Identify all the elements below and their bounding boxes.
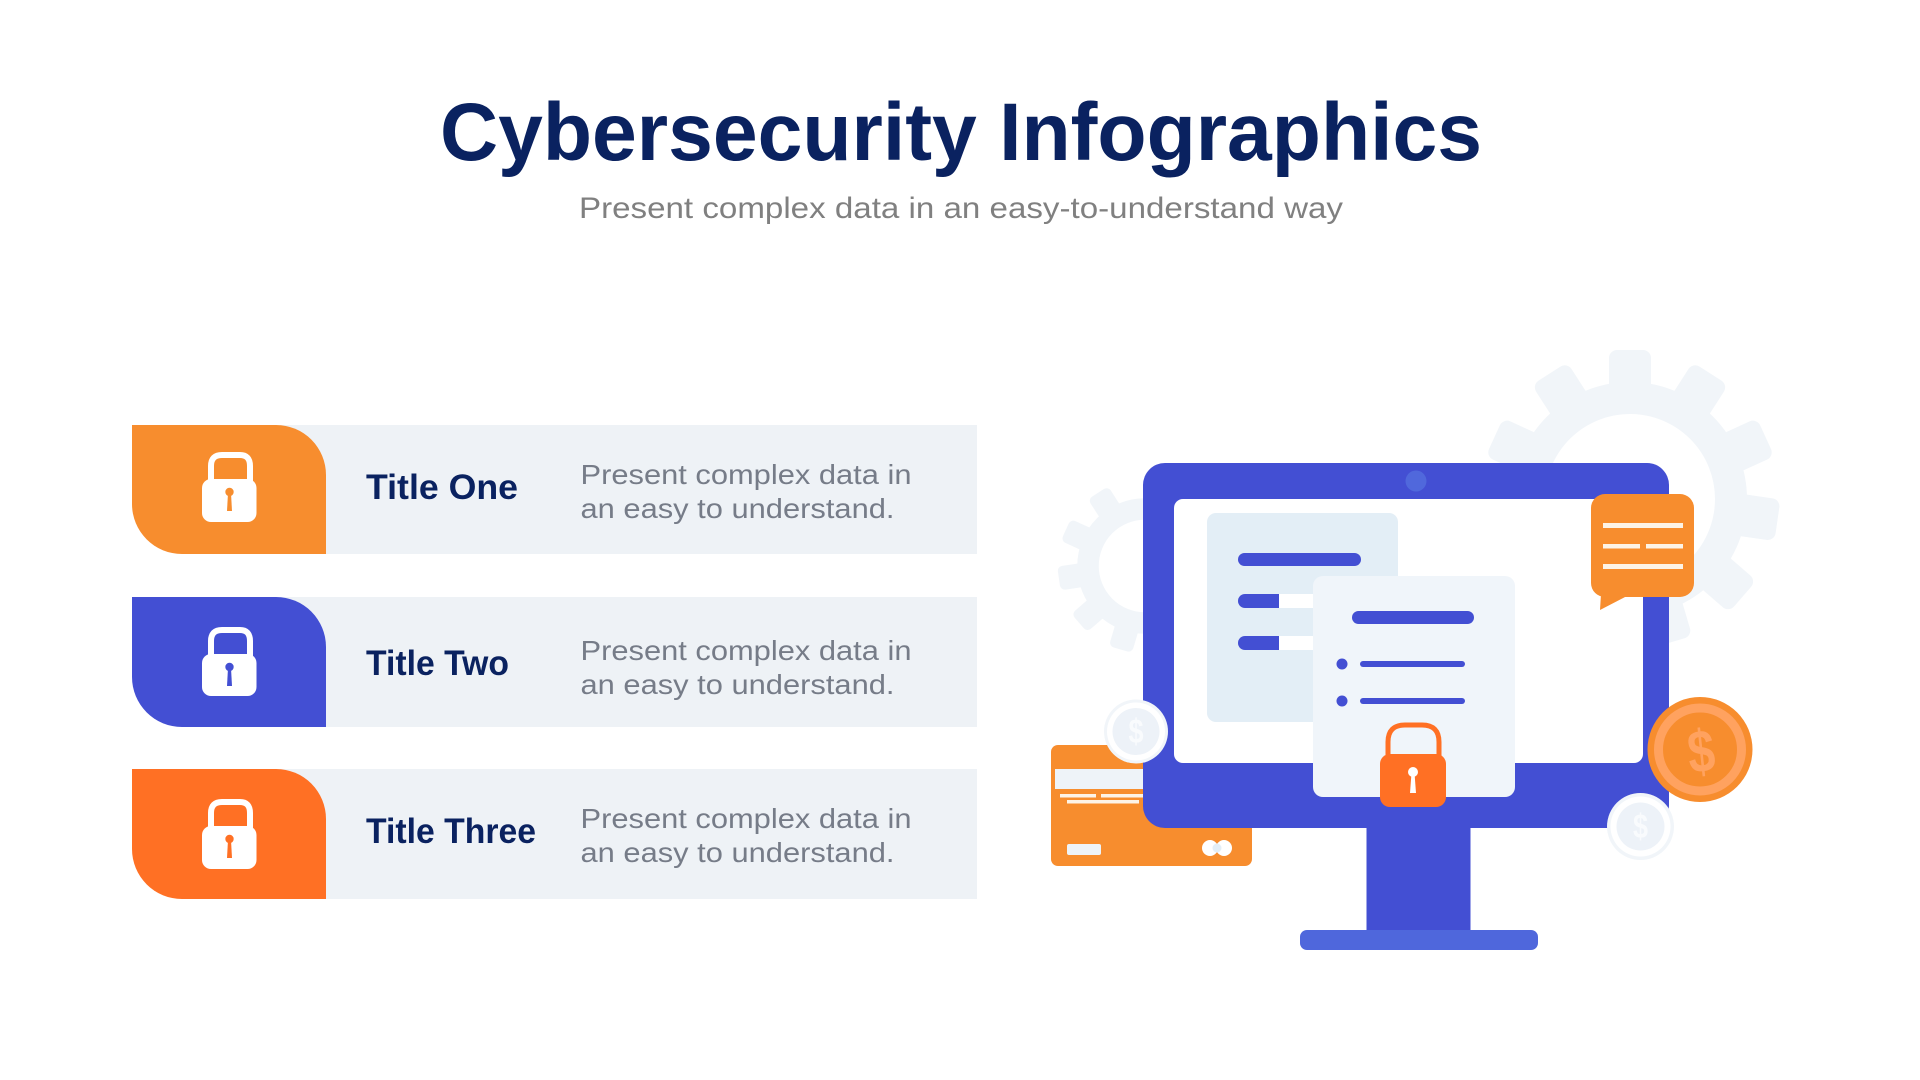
screen xyxy=(1174,499,1643,763)
row two description: an easy to understand. xyxy=(580,669,894,700)
row two colored tab xyxy=(132,597,326,727)
icon: small background gear xyxy=(1057,486,1202,653)
panel: row three xyxy=(132,769,977,899)
panel: row one xyxy=(132,425,977,554)
icon: large dollar coin xyxy=(1648,697,1752,802)
webcam xyxy=(1406,470,1426,492)
row three colored tab xyxy=(132,769,326,899)
monitor base xyxy=(1300,930,1538,950)
row one colored tab xyxy=(132,425,326,554)
icon: large dollar coin: $ xyxy=(1684,717,1718,786)
panel: row two xyxy=(132,597,977,727)
speech bubble xyxy=(1591,494,1694,610)
icon: padlock three xyxy=(202,802,256,869)
icon: padlock one xyxy=(202,455,256,522)
icon: large background gear xyxy=(1486,350,1780,648)
row two description: Present complex data in xyxy=(580,635,912,666)
title: Cybersecurity Infographics xyxy=(440,87,1482,178)
row two title: Title Two xyxy=(366,644,509,683)
row one background xyxy=(280,425,977,554)
row two description xyxy=(580,635,912,700)
icon: padlock two xyxy=(202,630,256,696)
credit card xyxy=(1051,745,1252,866)
row three description: an easy to understand. xyxy=(580,837,894,868)
row three description: Present complex data in xyxy=(580,803,912,834)
row two background xyxy=(280,597,977,727)
row one description xyxy=(580,459,912,524)
row one title: Title One xyxy=(366,468,518,507)
icon: small coin left: $ xyxy=(1128,713,1144,751)
icon: small coin left xyxy=(1104,700,1168,764)
icon: document padlock xyxy=(1380,725,1446,807)
monitor stand xyxy=(1366,820,1470,934)
row one description: an easy to understand. xyxy=(580,493,894,524)
row one description: Present complex data in xyxy=(580,459,912,490)
back document xyxy=(1207,513,1398,722)
row three description xyxy=(580,803,912,868)
row three title: Title Three xyxy=(366,812,536,851)
icon: small coin right: $ xyxy=(1633,808,1648,846)
icon: small coin right xyxy=(1607,793,1674,860)
monitor body xyxy=(1143,463,1669,828)
row three background xyxy=(280,769,977,899)
front document xyxy=(1313,576,1515,797)
subtitle: Present complex data in an easy-to-understand way xyxy=(579,192,1343,225)
illustration: computer security scene xyxy=(1051,350,1780,950)
